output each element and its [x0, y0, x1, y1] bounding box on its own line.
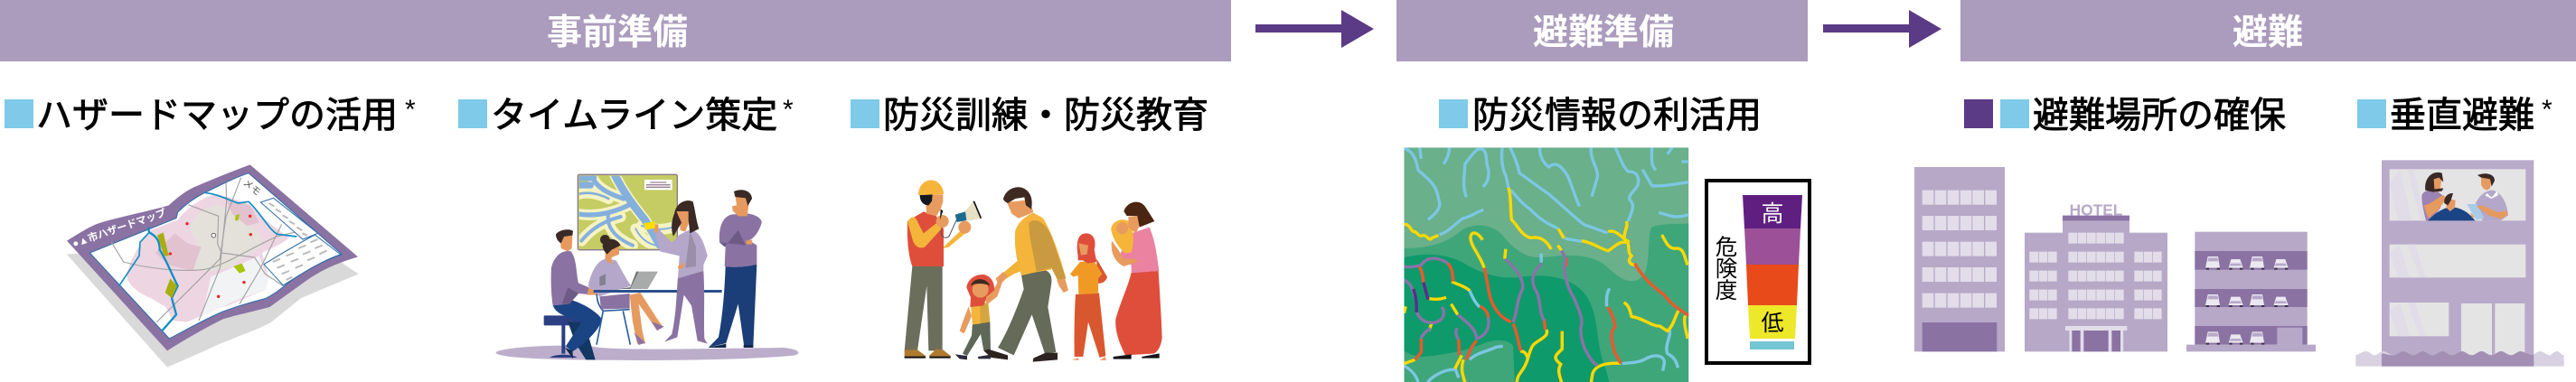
map title: ●▲市ハザードマップ: [71, 206, 168, 250]
legend: risk scale: 険: [1716, 256, 1737, 282]
heading: 避難: [1960, 0, 2576, 61]
building: [2382, 160, 2534, 367]
map legend tables: [260, 198, 341, 285]
flood water: [2355, 351, 2564, 367]
heading: 避難準備: 避難準備: [1533, 14, 1674, 52]
father: [983, 187, 1068, 362]
illustration: hazard information map: [1404, 147, 1688, 382]
map memo text: メモ: [240, 177, 262, 198]
label: ハザードマップの活用: *: [405, 95, 416, 125]
heading: 避難準備: [1396, 0, 1808, 61]
standing woman: [644, 200, 708, 344]
legend: risk scale: 高: [1761, 201, 1784, 227]
label: 垂直避難: *: [2542, 95, 2552, 125]
map rivers: [119, 192, 296, 331]
legend: risk scale: 度: [1716, 278, 1737, 303]
heading: 避難: 避難: [2233, 14, 2303, 52]
label: 防災訓練・防災教育: 防災訓練・防災教育: [883, 96, 1208, 135]
legend: risk scale: [1706, 181, 1810, 363]
arrow: 避難準備 to 避難: [1823, 10, 1941, 48]
illustration: hazard map booklet: [67, 164, 359, 368]
girl: [1070, 233, 1107, 360]
illustration: vertical evacuation in a flooded building: [2355, 160, 2564, 367]
label: タイムライン策定: *: [783, 95, 794, 125]
arrow: 事前準備 to 避難準備: [1255, 10, 1374, 48]
parking garage: [2186, 232, 2316, 351]
small child: [955, 275, 1002, 359]
mother with baby: [1111, 202, 1162, 359]
rivers: warning: [1415, 257, 1688, 363]
cars: [2205, 256, 2289, 343]
rivers: extreme danger: [1414, 283, 1428, 312]
map roads: [111, 178, 296, 322]
seated man: [544, 229, 602, 359]
map hazard shading: [127, 194, 289, 322]
rivers: low risk: [1404, 147, 1688, 382]
legend: risk scale: 危: [1716, 235, 1737, 260]
wall map: [577, 174, 677, 250]
chair, laptop, table and seated woman: [588, 235, 722, 345]
label: タイムライン策定: タイムライン策定: [491, 96, 777, 135]
illustration: people planning a timeline in front of a wall map: [496, 174, 798, 360]
map shelter dots: [169, 215, 252, 298]
illustration: evacuation buildings: [1914, 167, 2316, 351]
standing man: [709, 190, 762, 348]
hotel: [2025, 200, 2167, 351]
rivers: caution: [1404, 188, 1688, 382]
office building: [1914, 167, 2005, 351]
illustration: evacuation drill family with megaphone: [905, 180, 1162, 362]
ground: [496, 345, 798, 360]
heading: 事前準備: [0, 0, 1231, 61]
legend: risk scale: 低: [1761, 311, 1784, 336]
map green patches: [157, 232, 169, 256]
label: 避難場所の確保: 避難場所の確保: [2033, 96, 2286, 135]
rivers: danger: [1404, 250, 1597, 366]
leader with megaphone: [905, 180, 981, 359]
label: 防災情報の利活用: 防災情報の利活用: [1472, 96, 1762, 135]
family at the upper window: [2421, 172, 2508, 220]
heading: 事前準備: 事前準備: [547, 14, 688, 52]
hotel: HOTEL: [2070, 200, 2123, 219]
label: ハザードマップの活用: ハザードマップの活用: [36, 96, 398, 135]
label: 垂直避難: 垂直避難: [2390, 96, 2534, 135]
